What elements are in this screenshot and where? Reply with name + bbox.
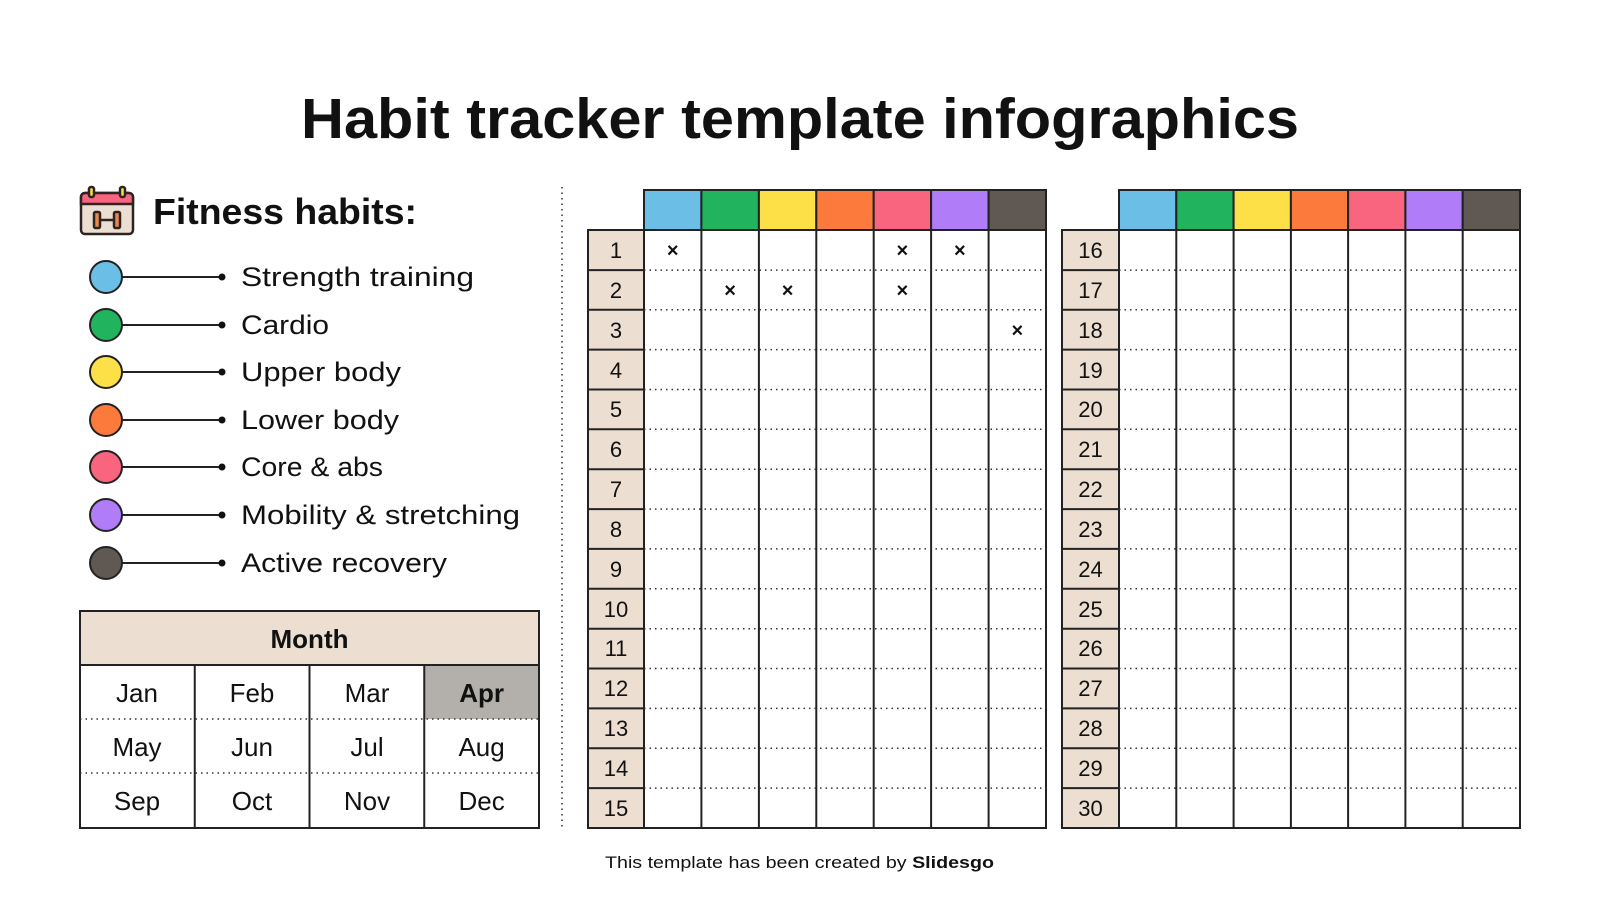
legend: Strength training [241,262,474,292]
grid: days 16-30: 25 [1078,597,1103,622]
grid: days 1-15: 15 [604,796,628,821]
grid: days 1-15: 8 [610,517,622,542]
grid: days 16-30: 24 [1078,557,1103,582]
grid: days 16-30: 28 [1078,716,1103,741]
grid: days 16-30: 18 [1078,318,1103,343]
grid: days 16-30: 30 [1078,796,1103,821]
check marks: × [782,280,793,302]
legend: Cardio [241,310,329,340]
check marks: × [954,240,966,262]
month table: Apr [459,678,504,708]
check marks: × [897,280,908,302]
legend: Upper body [241,357,402,387]
month table: Jul [350,732,384,762]
grid: days 16-30: 17 [1078,278,1103,303]
grid: days 16-30: 20 [1078,397,1103,422]
month table: Feb [230,678,274,708]
grid: days 16-30: 29 [1078,756,1103,781]
grid: days 16-30: 22 [1078,477,1103,502]
grid: days 16-30: 16 [1078,238,1103,263]
grid: days 1-15: 7 [610,477,622,502]
grid: days 1-15: 5 [610,397,622,422]
grid: days 1-15: 6 [610,437,622,462]
check marks: × [897,240,908,262]
month table: Aug [458,732,505,762]
grid: days 16-30 [1062,190,1520,828]
grid: days 1-15 [588,190,1046,828]
month table: May [112,732,162,762]
legend: Mobility & stretching [241,500,520,530]
grid: days 1-15: 10 [604,597,628,622]
month table [80,611,539,828]
legend [90,261,520,579]
grid: days 16-30: 26 [1078,636,1103,661]
check marks: × [667,240,679,262]
month table: Dec [458,786,505,816]
month table: Nov [344,786,390,816]
month table: Jan [116,678,158,708]
grid: days 1-15: 1 [610,238,622,263]
month table: Sep [114,786,160,816]
grid: days 1-15: 3 [610,318,622,343]
grid: days 16-30: 21 [1078,437,1103,462]
grid: days 16-30: 19 [1078,358,1103,383]
grid: days 1-15: 4 [610,358,622,383]
month table: Month [271,624,348,654]
month table: Oct [232,786,273,816]
grid: days 1-15: 14 [604,756,628,781]
grid: days 1-15: 9 [610,557,622,582]
check marks: × [1011,320,1023,342]
legend: Lower body [241,405,400,435]
grid: days 16-30: 27 [1078,676,1103,701]
grid: days 1-15: 12 [604,676,628,701]
check marks: × [724,280,736,302]
footer credit: This template has been created by Slidesgo [605,853,994,872]
check marks [667,240,1023,342]
grid: days 1-15: 13 [604,716,628,741]
legend: Active recovery [241,548,448,578]
icon: calendar dumbbell [81,187,133,234]
title: Habit tracker template infographics [301,87,1299,151]
grid: days 16-30: 23 [1078,517,1103,542]
legend: Core & abs [241,452,383,482]
heading: fitness habits: Fitness habits: [153,191,417,232]
grid: days 1-15: 11 [605,636,627,661]
grid: days 1-15: 2 [610,278,622,303]
month table: Mar [345,678,390,708]
month table: Jun [231,732,273,762]
